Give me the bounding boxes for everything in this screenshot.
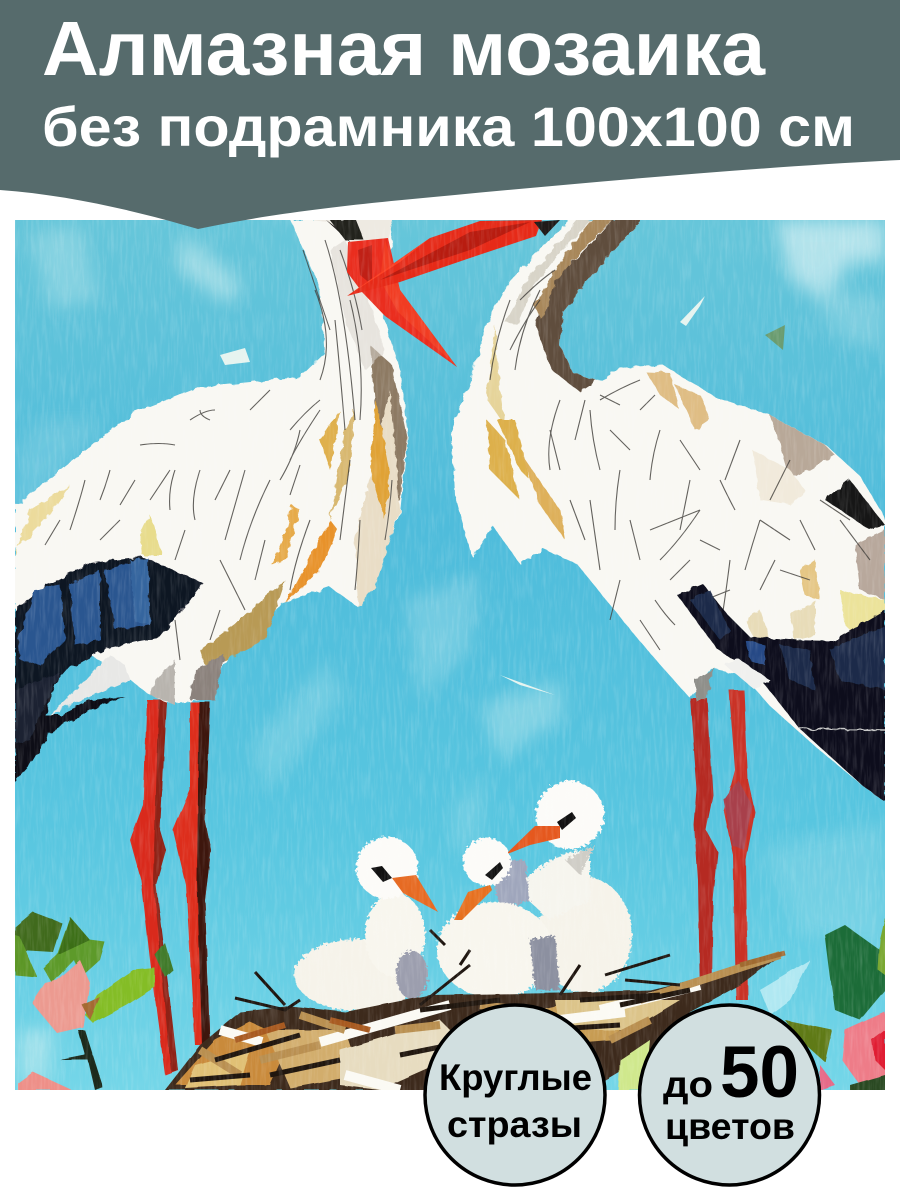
nest straw strokes	[190, 930, 785, 1090]
badge: round rhinestones: стразы	[447, 1104, 582, 1145]
right stork: body and neck	[452, 220, 885, 802]
right stork: red beak	[347, 220, 560, 296]
badge: up to 50 colours: до	[663, 1064, 713, 1105]
chick right	[525, 781, 632, 993]
subtitle: без подрамника 100х100 см	[42, 95, 855, 158]
left stork: leg near	[173, 702, 211, 1045]
left stork: feather lines	[45, 240, 392, 660]
right stork: black wing	[677, 584, 885, 802]
left stork: red beak	[347, 238, 457, 367]
badge: round rhinestones	[425, 1005, 605, 1185]
badge: up to 50 colours: цветов	[665, 1106, 795, 1147]
right stork: feather lines	[490, 270, 870, 650]
left stork: black and blue wing	[15, 557, 203, 782]
right stork: legs	[690, 690, 755, 1002]
header banner	[0, 0, 900, 229]
nest	[165, 955, 780, 1090]
chick middle	[437, 838, 560, 998]
chick left face	[371, 866, 438, 912]
chick middle face	[454, 862, 503, 920]
left flowers and leaves	[15, 912, 155, 1090]
badge: round rhinestones: Круглые	[439, 1057, 592, 1098]
left stork: body and neck	[15, 220, 408, 705]
chick left	[294, 837, 428, 1011]
badge: up to 50 colours: 50	[720, 1032, 799, 1113]
left stork: leg far	[130, 700, 178, 1075]
sky background	[15, 220, 885, 1090]
right flowers and leaves	[618, 918, 885, 1090]
title: Алмазная мозаика	[42, 6, 766, 92]
chick right face	[505, 812, 576, 855]
palette-knife texture	[15, 220, 885, 1090]
painting: storks and nest	[15, 220, 885, 1090]
badge: up to 50 colours	[640, 1005, 820, 1185]
left stork: head	[314, 220, 392, 242]
